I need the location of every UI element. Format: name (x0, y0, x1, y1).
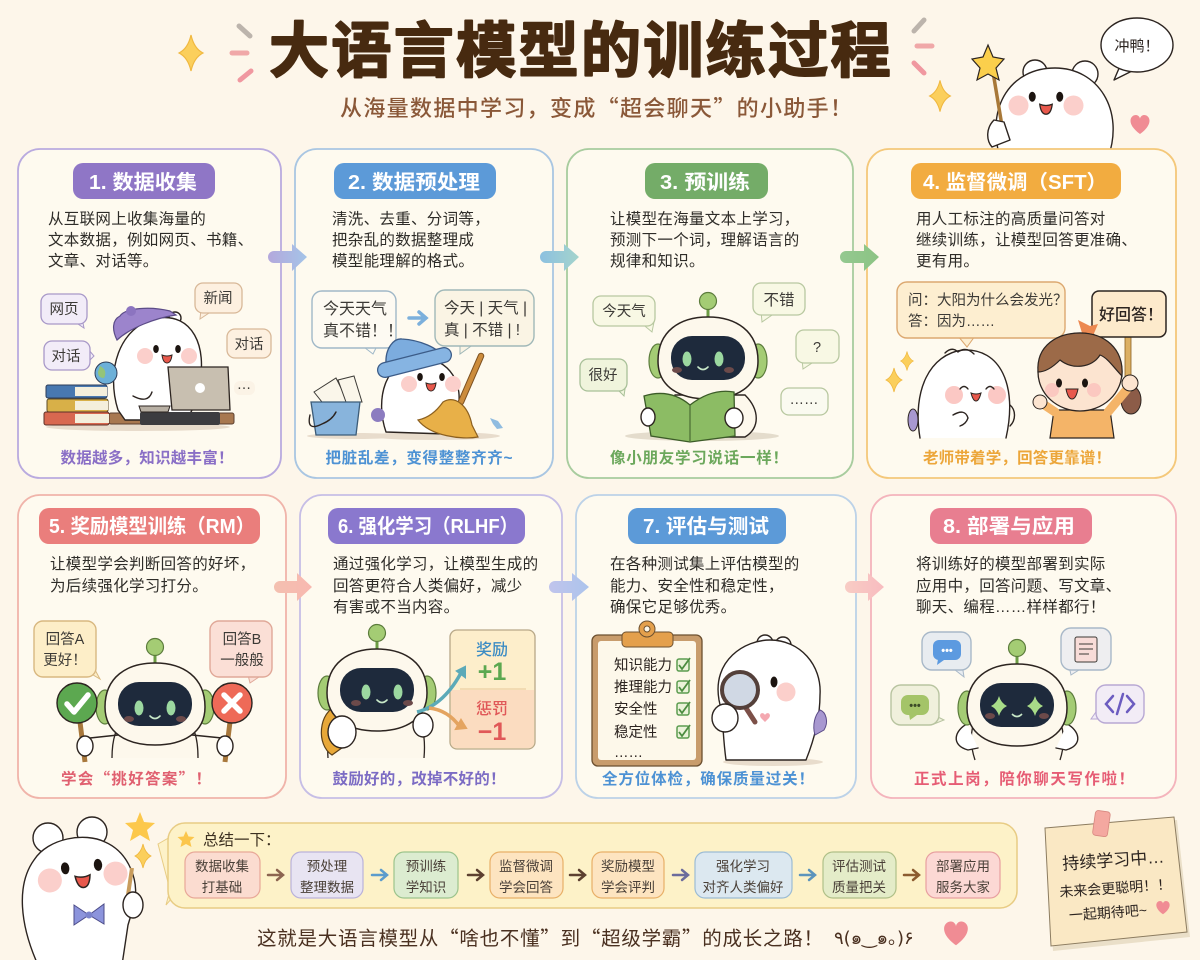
bubble: 今天气 (593, 296, 655, 332)
panel: 1 data collection (18, 149, 281, 478)
body text 5: 让模型学会判断回答的好坏， (50, 555, 255, 573)
kaomoji: ٩(๑‿๑。)۶ (834, 928, 914, 949)
caption 5: 学会“挑好答案”！ (61, 767, 211, 789)
mascot: bear with star wand and speech bubble (972, 18, 1173, 158)
panel: summary flow bubble (158, 823, 1017, 908)
body text 3: 规律和知识。 (610, 252, 705, 270)
badge 6: 6. 强化学习（RLHF） (338, 515, 518, 538)
bubble: answer B (210, 621, 272, 683)
step boxes: 评估测试 (832, 859, 886, 874)
bubble: answer A: 回答A (46, 631, 85, 648)
caption 8: 正式上岗，陪你聊天写作啦！ (914, 769, 1134, 788)
body text 6: 有害或不当内容。 (333, 598, 459, 616)
arrow 3 to 4 (840, 244, 879, 271)
badge 3: 3. 预训练 (660, 170, 750, 194)
step boxes: 预训练 (406, 859, 446, 874)
icon: code bubble (1091, 685, 1144, 723)
sticky note: 未来会更聪明！！ (1059, 876, 1172, 900)
body text 2: 清洗、去重、分词等， (332, 210, 490, 228)
caption 4: 老师带着学，回答更靠谱！ (923, 448, 1111, 467)
body text 3: 让模型在海量文本上学习， (610, 210, 800, 228)
step boxes (185, 852, 1000, 898)
bubble: answer A: 更好！ (43, 652, 87, 669)
illustration: happy bear (886, 349, 1014, 438)
illustration: robot reading (625, 292, 779, 442)
bubble: raw text (312, 291, 403, 354)
bubble: tokens (435, 290, 534, 354)
bubble: 今天气: 今天气 (602, 303, 646, 320)
body text 7: 在各种测试集上评估模型的 (610, 555, 800, 573)
badge 2 (334, 163, 496, 199)
bubble: 网页: 网页 (50, 302, 78, 318)
badge 8: 8. 部署与应用 (943, 514, 1075, 538)
sign: good answer: 好回答！ (1099, 306, 1163, 324)
bubble: 不错: 不错 (763, 291, 795, 309)
mascot: bear with star wand and speech bubble: 冲鸭！ (1114, 38, 1160, 55)
badge 4: 4. 监督微调（SFT） (923, 171, 1107, 194)
icon: green chat bubble: ••• (909, 700, 921, 712)
panel: 5 reward model (18, 495, 286, 798)
clipboard checklist: 推理能力 (614, 679, 672, 696)
step boxes: 学会评判 (601, 880, 655, 895)
bubble: raw text: 真不错！！ (323, 322, 403, 340)
clipboard checklist (592, 621, 702, 766)
illustration: teacher girl (1033, 320, 1141, 438)
bubble: dots: …… (790, 392, 818, 408)
bubble: dots (781, 388, 828, 415)
arrow 2 to 3 (540, 244, 579, 271)
body text 8: 应用中，回答问题、写文章、 (916, 576, 1121, 595)
clipboard checklist: 知识能力 (614, 657, 672, 674)
caption 7: 全方位体检，确保质量过关！ (602, 769, 814, 788)
body text 5: 为后续强化学习打分。 (50, 577, 208, 595)
badge 7 (628, 508, 786, 544)
bubble: answer A (34, 621, 100, 679)
bubble: question (796, 330, 839, 369)
illustration: bear with magnifier (712, 635, 827, 766)
arrow 6 to 7 (549, 573, 589, 601)
badge 4 (911, 163, 1121, 199)
caption 6: 鼓励好的，改掉不好的！ (332, 769, 506, 788)
sign: good answer (1092, 291, 1166, 405)
closing sentence: 这就是大语言模型从“啥也不懂”到“超级学霸”的成长之路！ (257, 922, 823, 951)
illustration: bear sweeping (307, 339, 503, 440)
body text 8: 将训练好的模型部署到实际 (916, 555, 1106, 573)
bubble: 对话 left: 对话 (52, 348, 80, 365)
summary heading: 总结一下： (203, 831, 281, 849)
badge 3 (645, 163, 768, 199)
body text 6: 通过强化学习，让模型生成的 (333, 555, 538, 573)
illustration: robot with paddles (57, 638, 252, 762)
bubble: question: ? (813, 340, 821, 356)
icon: star (178, 831, 194, 847)
step boxes: 强化学习 (716, 859, 770, 874)
bubble: 很好 (580, 359, 627, 396)
badge 5: 5. 奖励模型训练（RM） (49, 514, 255, 538)
icon: blue chat bubble: ••• (941, 645, 953, 657)
panel: 2 preprocessing (295, 149, 553, 478)
bubble: question and answer: 问：大阳为什么会发光？ (908, 292, 1068, 309)
bubble: answer B: 回答B (223, 631, 261, 648)
body text 1: 从互联网上收集海量的 (48, 210, 206, 228)
badge 8 (930, 508, 1092, 544)
illustration: bear with laptop and books (44, 306, 234, 431)
bubble: ellipsis (234, 377, 255, 395)
bubble: answer B: 一般般 (220, 652, 264, 669)
step boxes: 整理数据 (300, 880, 354, 895)
body text 7: 确保它足够优秀。 (610, 598, 736, 616)
bubble: tokens: 今天 | 天气 | (444, 299, 527, 317)
bubble: 新闻: 新闻 (204, 290, 232, 307)
body text 1: 文章、对话等。 (48, 252, 159, 270)
body text 2: 模型能理解的格式。 (332, 252, 474, 270)
bubble: 很好: 很好 (588, 367, 618, 384)
sticky note: 持续学习中… (1062, 848, 1165, 874)
icon: document bubble (1061, 628, 1111, 675)
illustration: robot with backpack (318, 624, 466, 758)
card: reward and penalty (450, 630, 535, 749)
clipboard checklist: 安全性 (614, 700, 658, 718)
step boxes: 打基础 (202, 879, 242, 895)
bubble: 网页 (41, 294, 87, 328)
body text 8: 聊天、编程……样样都行！ (916, 598, 1106, 616)
arrow: tokenize (409, 312, 426, 324)
card: reward and penalty: 惩罚 (476, 700, 508, 718)
caption 1: 数据越多，知识越丰富！ (60, 448, 234, 467)
body text 4: 用人工标注的高质量问答对 (916, 210, 1106, 228)
arrow 1 to 2 (268, 244, 307, 271)
bubble: question and answer (897, 282, 1068, 347)
step boxes: 预处理 (307, 859, 348, 874)
badge 7: 7. 评估与测试 (643, 515, 769, 538)
clipboard checklist: 稳定性 (614, 724, 658, 741)
body text 1: 文本数据，例如网页、书籍、 (48, 231, 253, 249)
icon: green chat bubble (891, 685, 944, 725)
body text 7: 能力、安全性和稳定性， (610, 577, 784, 595)
bubble: question and answer: 答：因为…… (908, 313, 995, 330)
badge 2: 2. 数据预处理 (348, 171, 480, 194)
caption 3: 像小朋友学习说话一样！ (610, 448, 788, 467)
panel: 4 supervised fine-tuning (867, 149, 1176, 478)
arrow 5 to 6 (274, 573, 312, 601)
illustration: robot with sparkle eyes (956, 640, 1078, 760)
step boxes: 学会回答 (499, 879, 553, 895)
step boxes: 数据收集 (195, 859, 249, 874)
bubble: raw text: 今天天气 (323, 300, 387, 318)
bubble: tokens: 真 | 不错 | ! (444, 321, 520, 339)
panel: 7 evaluation (576, 495, 856, 798)
step boxes: 奖励模型 (601, 858, 655, 874)
icon: blue chat bubble (922, 632, 971, 677)
card: reward and penalty: +1 (478, 658, 506, 686)
title decorations (179, 20, 950, 112)
bubble: 新闻 (195, 283, 242, 319)
arrow 7 to 8 (845, 573, 884, 601)
panel: 6 RLHF (300, 495, 562, 798)
bubble: 对话 right: 对话 (234, 336, 264, 353)
icon: heart (944, 922, 968, 945)
card: reward and penalty: 奖励 (476, 641, 508, 659)
card: reward and penalty: −1 (478, 718, 506, 746)
badge 1 (73, 163, 215, 199)
step boxes: 部署应用 (936, 858, 990, 874)
flow arrows (268, 870, 919, 880)
sticky note (1045, 810, 1190, 951)
badge 5 (39, 508, 260, 544)
clipboard checklist: …… (614, 745, 643, 761)
mascot: summary bear with stars (22, 812, 155, 960)
body text 2: 把杂乱的数据整理成 (332, 231, 474, 249)
step boxes: 服务大家 (936, 879, 990, 895)
bubble: 不错 (753, 283, 805, 322)
body text 4: 继续训练，让模型回答更准确、 (916, 231, 1137, 249)
body text 6: 回答更符合人类偏好，减少 (333, 577, 523, 595)
panel: 3 pretraining (567, 149, 853, 478)
panel: 8 deployment (871, 495, 1176, 798)
bubble: 对话 left (44, 341, 94, 370)
body text 4: 更有用。 (916, 252, 979, 270)
badge 6 (328, 508, 525, 544)
body text 3: 预测下一个词，理解语言的 (610, 231, 800, 249)
bubble: 对话 right (227, 329, 271, 358)
badge 1: 1. 数据收集 (89, 171, 197, 194)
bubble: ellipsis: … (237, 377, 251, 393)
step boxes: 监督微调 (499, 859, 553, 874)
step boxes: 对齐人类偏好 (702, 880, 784, 895)
sticky note: 一起期待吧~ (1068, 902, 1147, 923)
caption 2: 把脏乱差，变得整整齐齐~ (326, 448, 512, 467)
subtitle: 从海量数据中学习，变成“超会聊天”的小助手！ (340, 91, 852, 123)
title: 大语言模型的训练过程 (269, 18, 893, 85)
step boxes: 学知识 (406, 879, 446, 895)
step boxes: 质量把关 (832, 880, 886, 895)
